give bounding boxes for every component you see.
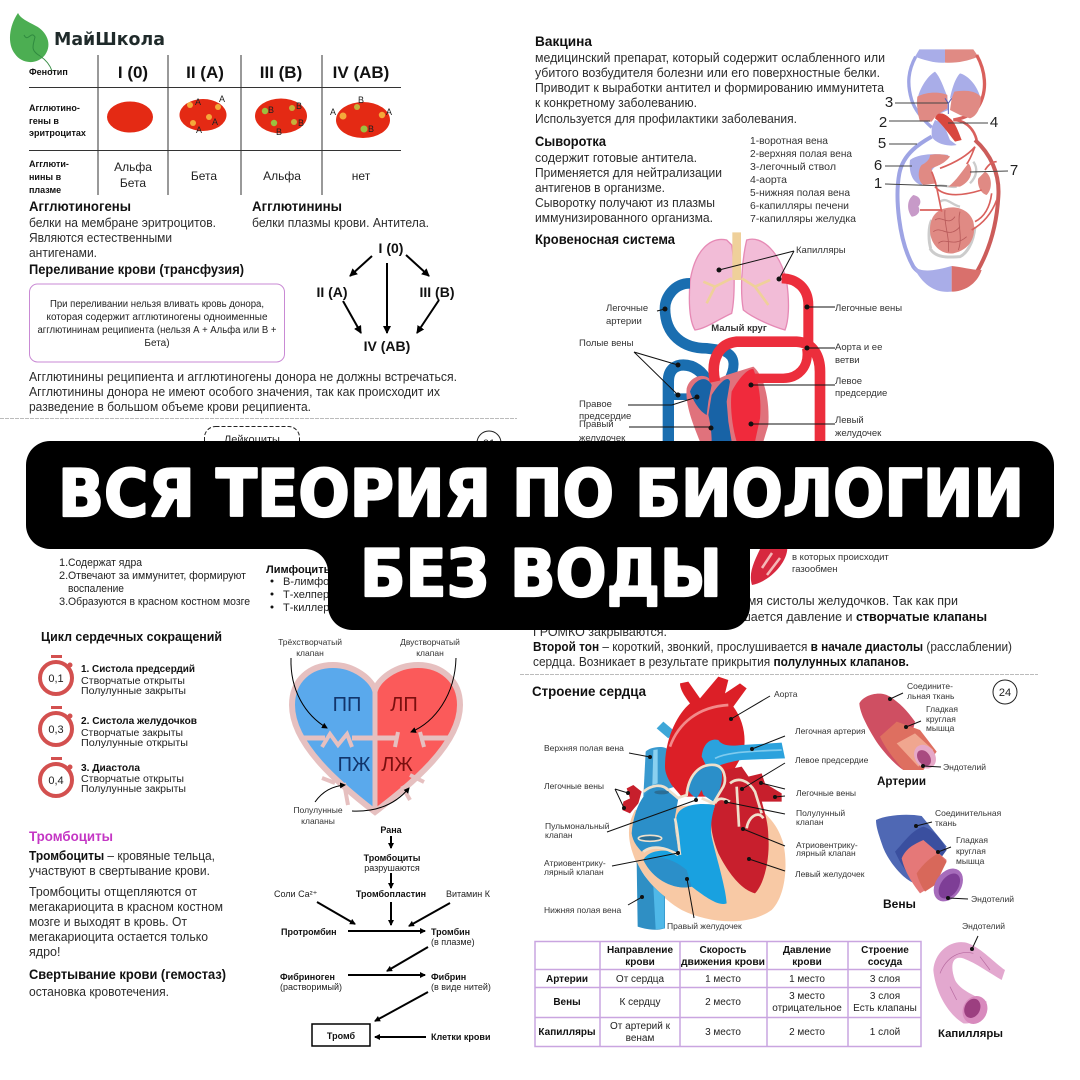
timer: atrial systole <box>40 655 195 697</box>
diagram: pulmonary and systemic circuits: Легочные вены <box>835 303 902 314</box>
text: heart sounds: ГРОМКО закрываются. <box>533 625 667 639</box>
text: white blood cell properties: 1. <box>59 557 68 569</box>
text: vaccine: к конкретному заболеванию. <box>535 96 697 110</box>
labels: Аорта <box>774 689 798 699</box>
text: white blood cell properties: Отвечают за иммунитет, формируют <box>68 570 246 582</box>
diagram: heart chambers and valves: Двустворчатый <box>400 637 460 647</box>
body vessels <box>898 137 932 278</box>
icon: red blood cell, no antigens <box>107 102 153 132</box>
pulmonary veins <box>622 785 642 813</box>
heading: transfusion: Переливание крови (трансфузия) <box>29 262 244 277</box>
superior vena cava <box>643 747 675 797</box>
intestine <box>930 207 974 253</box>
diagram: blood clotting flow: Рана <box>380 825 403 835</box>
text: lymphocytes list: Лимфоциты <box>266 564 333 576</box>
diagram: anatomical heart: Атриовентрику- <box>796 840 858 850</box>
aorta <box>665 677 747 797</box>
diagram: vein wall layers: Эндотелий <box>971 894 1014 904</box>
gray fat <box>935 162 976 207</box>
inferior vena cava <box>637 862 665 930</box>
text: platelets description: Тромбоциты отщепляются от <box>29 885 197 899</box>
table: blood group phenotypes: Агглюти- <box>29 159 69 169</box>
diagram: blood clotting flow: Тромбин <box>431 927 470 937</box>
text: serum: содержит готовые антитела. <box>535 151 697 165</box>
table: vessel comparison: венам <box>626 1033 654 1044</box>
page number 24: 24 <box>999 687 1011 699</box>
diagram: circulation with numbered vessels: 4 <box>990 114 998 131</box>
table: vessel comparison: отрицательное <box>772 1003 842 1014</box>
table: vessel comparison: От сердца <box>616 974 665 985</box>
diagram: anatomical heart: Атриовентрику- <box>544 858 606 868</box>
diagram: heart chambers and valves <box>278 637 460 826</box>
pulmonary chamber <box>688 766 722 802</box>
table: vessel comparison: 2 место <box>789 1027 825 1038</box>
text: white blood cell properties: воспаление <box>68 583 124 595</box>
text: heart sounds: сокращении желудочков в них резко повышается давление и створчатые клапаны <box>497 610 987 624</box>
diagram: pulmonary and systemic circuits: Левый <box>835 415 864 426</box>
diagram: blood group compatibility arrows <box>316 240 454 354</box>
icon: red blood cell, antigen A <box>180 94 226 135</box>
pulmonary arteries <box>665 283 727 351</box>
timer: diastole: Полулунные закрыты <box>81 784 186 795</box>
table: vessel comparison: крови <box>792 957 822 968</box>
table: vessel comparison <box>535 941 921 1047</box>
timer: ventricular systole: Полулунные открыты <box>81 738 188 749</box>
diagram: circulation with numbered vessels: 1 <box>874 175 882 192</box>
diagram: heart chambers and valves: Трёхстворчатый <box>278 637 342 647</box>
diagram: anatomical heart: Левое предсердие <box>795 755 869 765</box>
callout: transfusion rule: агглютининам реципиента (нельзя А + Альфа или В + <box>38 324 277 336</box>
page number 24 <box>993 680 1017 704</box>
text: vaccine: Используется для профилактики заболевания. <box>535 112 797 126</box>
stomach <box>948 163 971 187</box>
logo: МайШкола: МайШкола <box>54 29 165 50</box>
diagram: capillary: Капилляры <box>938 1028 1003 1040</box>
table: blood group phenotypes: плазме <box>29 185 61 195</box>
icon: red blood cell, antigen B: B <box>268 105 274 115</box>
table: blood group phenotypes: Альфа <box>114 160 152 174</box>
page number circle <box>477 431 501 455</box>
timer: diastole <box>40 757 186 796</box>
text: vaccine: медицинский препарат, который содержит ослабленного или <box>535 51 885 65</box>
diagram: heart chambers and valves: Полулунные <box>293 805 343 815</box>
text: agglutinogens definition <box>29 199 216 260</box>
table: blood group phenotypes: II (A) <box>186 63 224 82</box>
table: blood group phenotypes: эритроцитах <box>29 128 86 138</box>
table: blood group phenotypes <box>29 55 401 195</box>
heading: cardiac cycle: Цикл сердечных сокращений <box>41 629 222 644</box>
table: vessel comparison: движения крови <box>681 957 765 968</box>
right atrium <box>632 785 678 853</box>
diagram: heart chambers and valves: клапан <box>416 648 444 658</box>
diagram: artery wall layers: льная ткань <box>907 691 955 701</box>
text: lymphocytes list: Т-хелперы <box>283 589 337 601</box>
table: vessel comparison: 3 место <box>705 1027 741 1038</box>
liver <box>910 154 948 185</box>
diagram: heart chambers and valves: ПЖ <box>338 754 371 776</box>
diagram: capillary fragment with gas exchange note: газообмен <box>792 564 838 575</box>
diagram: blood group compatibility arrows: IV (AB) <box>364 338 410 354</box>
callout: transfusion rule: которая содержит агглютиногены одноименные <box>46 312 268 323</box>
diagram: pulmonary and systemic circuits: Аорта и ее <box>835 342 882 353</box>
text: platelets description: остановка кровотечения. <box>29 985 169 999</box>
text: white blood cell properties: Содержат ядра <box>68 557 143 569</box>
table: vessel comparison: 1 слой <box>870 1027 900 1038</box>
table: vessel comparison: Строение <box>861 945 909 956</box>
table: blood group phenotypes: нины в <box>29 172 62 182</box>
internal arteries and portal vein <box>920 147 997 230</box>
diagram: pulmonary and systemic circuits: Правый <box>579 419 614 430</box>
diagram: heart chambers and valves: клапан <box>296 648 324 658</box>
timer: atrial systole: 1. Систола предсердий <box>81 664 195 675</box>
diagram: circulation with numbered vessels: 7 <box>1010 162 1018 179</box>
icon: red blood cell, antigen B: B <box>298 118 304 128</box>
table: vessel comparison: сосуда <box>868 957 903 968</box>
table: blood group phenotypes: Агглютино- <box>29 103 80 113</box>
text: serum: антигенов в организме. <box>535 181 665 195</box>
text: vaccine: Вакцина <box>535 34 592 49</box>
diagram: heart chambers and valves: ПП <box>333 694 361 716</box>
lungs <box>917 72 948 122</box>
text: platelets description: мегакариоцита остается только <box>29 930 208 944</box>
diagram: blood group compatibility arrows: I (0) <box>379 240 403 256</box>
title banner <box>26 441 1054 630</box>
diagram: anatomical heart: Полулунный <box>796 808 845 818</box>
diagram: pulmonary and systemic circuits: ветви <box>835 355 860 366</box>
diagram: blood group compatibility arrows: III (B) <box>420 284 454 300</box>
table: vessel comparison: 2 место <box>705 997 741 1008</box>
diagram: pulmonary and systemic circuits: Малый круг <box>711 323 767 334</box>
timer: atrial systole: Створчатые открыты <box>81 676 185 687</box>
timer: ventricular systole <box>40 706 197 749</box>
diagram: pulmonary and systemic circuits: желудочек <box>579 433 626 444</box>
text: lymphocytes list <box>266 564 355 614</box>
text: agglutinin paragraph <box>29 370 457 414</box>
table: blood group phenotypes: IV (AB) <box>333 63 389 82</box>
table: blood group phenotypes: нет <box>352 169 371 183</box>
diagram: blood clotting flow: Фибриноген <box>280 972 335 982</box>
diagram: blood clotting flow: Фибрин <box>431 972 466 982</box>
legend: circulation diagram numbers: 1-воротная вена <box>750 135 828 147</box>
lungs <box>689 239 734 330</box>
diagram: artery wall layers: Артерии <box>877 774 926 788</box>
text: agglutinins definition: Агглютинины <box>252 199 342 214</box>
icon: red blood cell, antigen B <box>255 98 307 137</box>
leader lines <box>628 251 835 427</box>
text: agglutinogens definition: белки на мембране эритроцитов. <box>29 216 216 230</box>
labels: Капилляры <box>796 245 846 256</box>
text: vaccine: Приводит к выработки антител и формированию иммунитета <box>535 81 884 95</box>
text: vaccine: убитого возбудителя болезни или его поверхностные белки. <box>535 66 880 80</box>
icon: red blood cell, antigen A: A <box>196 125 202 135</box>
text: serum: Применяется для нейтрализации <box>535 166 722 180</box>
text: agglutinins definition <box>252 199 429 230</box>
leg capillaries <box>913 266 952 292</box>
table: blood group phenotypes: III (B) <box>260 63 302 82</box>
diagram: anatomical heart: Пульмональный <box>545 821 610 831</box>
legend: circulation diagram numbers: 4-аорта <box>750 174 787 186</box>
text: heart sounds <box>425 594 1012 669</box>
diagram: blood clotting flow: Тромбопластин <box>356 889 426 899</box>
diagram: blood clotting flow: (растворимый) <box>280 982 342 992</box>
timer: ventricular systole: 2. Систола желудочков <box>81 716 197 727</box>
valves and walls <box>643 765 763 855</box>
diagram: blood clotting flow: (в плазме) <box>431 937 475 947</box>
diagram: capillary fragment with gas exchange note <box>751 545 889 585</box>
legend: circulation diagram numbers: 5-нижняя полая вена <box>750 187 850 199</box>
diagram: pulmonary and systemic circuits: Полые вены <box>579 338 634 349</box>
trachea and bronchi <box>724 232 750 280</box>
callout: transfusion rule <box>30 284 284 362</box>
text: serum: Сыворотка <box>535 134 606 149</box>
icon: red blood cell, antigen B: B <box>276 127 282 137</box>
heading: platelets: Тромбоциты <box>29 829 113 844</box>
text: platelets description: Свертывание крови (гемостаз) <box>29 967 226 982</box>
diagram: blood clotting flow: Витамин К <box>446 889 491 899</box>
diagram: pulmonary and systemic circuits: артерии <box>606 316 642 327</box>
callout: transfusion rule: При переливании нельзя вливать кровь донора, <box>50 299 264 310</box>
text: lymphocytes list: В-лимфоциты <box>283 576 355 588</box>
aorta and branches <box>714 342 820 442</box>
legend: circulation diagram numbers: 6-капилляры печени <box>750 200 849 212</box>
table: vessel comparison: Направление <box>607 945 673 956</box>
diagram: anatomical heart: Легочная артерия <box>795 726 866 736</box>
logo: МайШкола <box>10 13 165 71</box>
table: vessel comparison: Капилляры <box>538 1027 596 1038</box>
diagram: artery wall layers: Эндотелий <box>943 762 986 772</box>
table: blood group phenotypes: Бета <box>120 176 146 190</box>
heart <box>686 367 769 442</box>
table: blood group phenotypes: Фенотип <box>29 67 68 77</box>
diagram: vein wall layers: ткань <box>935 818 957 828</box>
diagram: pulmonary and systemic circuits: Левое <box>835 376 862 387</box>
callout: transfusion rule: Бета) <box>144 338 170 349</box>
diagram: anatomical heart: Нижняя полая вена <box>544 905 621 915</box>
diagram: vein wall layers <box>876 808 1014 911</box>
diagram: capillary <box>933 921 1005 1040</box>
text: platelets description: Тромбоциты – кровяные тельца, <box>29 849 215 863</box>
text: platelets description: участвуют в свертывание крови. <box>29 864 210 878</box>
diagram: circulation with numbered vessels <box>874 49 1018 292</box>
timer: diastole: 0,4 <box>48 775 64 787</box>
text: heart sounds: Второй тон – короткий, звонкий, прослушивается в начале диастолы (расслаблении) <box>533 640 1012 654</box>
text: serum: иммунизированного организма. <box>535 211 713 225</box>
timer: diastole: Створчатые открыты <box>81 774 184 785</box>
timer: diastole: 3. Диастола <box>81 763 140 774</box>
spleen <box>978 172 991 195</box>
icon: red blood cell, antigen A: A <box>195 97 201 107</box>
diagram: blood clotting flow: Тромб <box>327 1031 356 1041</box>
page number circle: 01 <box>483 438 495 450</box>
text: serum <box>535 134 722 225</box>
diagram: anatomical heart: клапан <box>545 830 573 840</box>
head capillaries <box>915 49 945 63</box>
icon: red blood cell, antigens A and B: B <box>368 124 374 134</box>
diagram: blood group compatibility arrows: II (A) <box>316 284 348 300</box>
diagram: heart chambers and valves: ЛП <box>390 694 418 716</box>
table: vessel comparison: 3 слоя <box>870 991 900 1002</box>
table: blood group phenotypes: гены в <box>29 116 59 126</box>
timer: atrial systole: 0,1 <box>48 673 64 685</box>
diagram: blood clotting flow: Тромбоциты <box>364 853 421 863</box>
diagram: vein wall layers: Гладкая <box>956 835 988 845</box>
diagram: artery wall layers: мышца <box>926 723 955 733</box>
table: vessel comparison: крови <box>625 957 655 968</box>
table: blood group phenotypes: Бета <box>191 169 217 183</box>
label: leukocytes heading box <box>204 426 300 456</box>
timer: ventricular systole: 0,3 <box>48 724 64 736</box>
table: vessel comparison: От артерий к <box>610 1021 671 1032</box>
diagram: circulation with numbered vessels: 6 <box>874 157 882 174</box>
table: vessel comparison: 1 место <box>789 974 825 985</box>
venae cavae <box>668 365 707 442</box>
diagram: vein wall layers: мышца <box>956 856 985 866</box>
table: vessel comparison: 3 слоя <box>870 974 900 985</box>
diagram: capillary fragment with gas exchange note: в которых происходит <box>792 552 889 563</box>
diagram: anatomical heart: Легочные вены <box>544 781 604 791</box>
heart <box>932 120 957 146</box>
diagram: pulmonary and systemic circuits: предсердие <box>835 388 887 399</box>
text: agglutinin paragraph: Агглютинины донора не имеют особого значения, так как происходит их <box>29 385 441 399</box>
table: vessel comparison: Вены <box>553 997 581 1008</box>
table: vessel comparison: 1 место <box>705 974 741 985</box>
diagram: artery wall layers: круглая <box>926 714 956 724</box>
text: agglutinogens definition: антигенами. <box>29 246 97 260</box>
diagram: vein wall layers: круглая <box>956 846 986 856</box>
diagram: anatomical heart: Правый желудочек <box>667 921 742 931</box>
diagram: pulmonary and systemic circuits: предсердие <box>579 411 631 422</box>
leader lines <box>607 696 785 918</box>
pulmonary stub <box>657 722 675 738</box>
diagram: anatomical heart: клапан <box>796 817 824 827</box>
icon: red blood cell, antigen A: A <box>219 94 225 104</box>
text: heart sounds: Первый тон – длинный, глухой, прослушивается во время систолы желудочков. Так как при <box>425 594 958 608</box>
diagram: artery wall layers: Гладкая <box>926 704 958 714</box>
diagram: blood clotting flow <box>274 825 491 1046</box>
number labels <box>885 103 1008 186</box>
diagram: anatomical heart: лярный клапан <box>796 848 856 858</box>
diagram: anatomical heart: лярный клапан <box>544 867 604 877</box>
title line 1: ВСЯ ТЕОРИЯ ПО БИОЛОГИИ <box>58 457 1024 532</box>
diagram: pulmonary and systemic circuits: Правое <box>579 399 612 410</box>
heading: circulatory system: Кровеносная система <box>535 232 675 247</box>
text: platelets description: мозге и выходят в кровь. От <box>29 915 187 929</box>
text: agglutinin paragraph: Агглютинины реципиента и агглютиногены донора не должны встречаться. <box>29 370 457 384</box>
icon: red blood cell, antigen A: A <box>212 117 218 127</box>
text: white blood cell properties: 3. <box>59 596 68 608</box>
diagram: blood clotting flow: (в виде нитей) <box>431 982 491 992</box>
title line 2: БЕЗ ВОДЫ <box>360 537 722 612</box>
icon: red blood cell, antigens A and B <box>330 95 392 138</box>
text: lymphocytes list: Т-киллеры <box>283 602 337 614</box>
table: vessel comparison: Скорость <box>700 945 746 956</box>
icon: red blood cell, antigen B: B <box>296 101 302 111</box>
timer: ventricular systole: Створчатые закрыты <box>81 728 183 739</box>
text: heart sounds: сердца. Возникает в результате прикрытия полулунных клапанов. <box>533 655 909 669</box>
legend: circulation diagram numbers <box>750 135 856 225</box>
diagram: blood clotting flow: разрушаются <box>364 863 420 873</box>
text: agglutinin paragraph: разведение в большом объеме крови реципиента. <box>29 400 311 414</box>
text: white blood cell properties <box>59 557 250 608</box>
text: platelets description: ядро! <box>29 945 60 959</box>
text: vaccine <box>535 34 885 126</box>
diagram: heart chambers and valves: клапаны <box>301 816 335 826</box>
timer: atrial systole: Полулунные закрыты <box>81 686 186 697</box>
diagram: anatomical heart: Верхняя полая вена <box>544 743 624 753</box>
text: white blood cell properties: 2. <box>59 570 68 582</box>
diagram: pulmonary and systemic circuits: Легочные <box>606 303 648 314</box>
diagram: circulation with numbered vessels: 2 <box>879 114 887 131</box>
peach heart wall <box>629 803 786 921</box>
diagram: vein wall layers: Вены <box>883 897 916 911</box>
diagram: blood clotting flow: Соли Ca²⁺ <box>274 889 318 899</box>
diagram: vein wall layers: Соединительная <box>935 808 1002 818</box>
table: vessel comparison: 3 место <box>789 991 825 1002</box>
text: agglutinogens definition: Являются естественными <box>29 231 172 245</box>
diagram: capillary: Эндотелий <box>962 921 1005 931</box>
pulmonary artery <box>702 740 785 770</box>
kidney <box>908 195 920 217</box>
heading: heart structure: Строение сердца <box>532 684 646 699</box>
table: vessel comparison: Давление <box>783 945 832 956</box>
diagram: pulmonary and systemic circuits: желудочек <box>835 428 882 439</box>
table: blood group phenotypes: I (0) <box>118 63 148 82</box>
diagram: pulmonary and systemic circuits <box>579 232 902 444</box>
diagram: anatomical heart <box>544 677 869 931</box>
legend: circulation diagram numbers: 7-капилляры желудка <box>750 213 856 225</box>
icon: red blood cell, antigens A and B: A <box>386 107 392 117</box>
diagram: artery wall layers: Соедините- <box>907 681 953 691</box>
diagram: anatomical heart: Легочные вены <box>796 788 856 798</box>
text: agglutinogens definition: Агглютиногены <box>29 199 131 214</box>
diagram: circulation with numbered vessels: 3 <box>885 94 893 111</box>
upper vessels <box>909 57 932 127</box>
label: leukocytes heading box: Лейкоциты <box>224 434 280 446</box>
diagram: circulation with numbered vessels: 5 <box>878 135 886 152</box>
right ventricle <box>643 804 727 904</box>
table: vessel comparison: Артерии <box>546 974 588 985</box>
text: platelets description: мегакариоцита в красном костном <box>29 900 223 914</box>
table: vessel comparison: К сердцу <box>619 997 661 1008</box>
legend: circulation diagram numbers: 2-верхняя полая вена <box>750 148 852 160</box>
diagram: blood clotting flow: Протромбин <box>281 927 337 937</box>
diagram: artery wall layers <box>859 681 986 788</box>
text: agglutinins definition: белки плазмы крови. Антитела. <box>252 216 429 230</box>
icon: red blood cell, antigens A and B: A <box>330 107 336 117</box>
table: vessel comparison: Есть клапаны <box>853 1003 917 1014</box>
diagram: heart chambers and valves: ЛЖ <box>381 754 413 776</box>
diagram: anatomical heart: Левый желудочек <box>795 869 865 879</box>
text: serum: Сыворотку получают из плазмы <box>535 196 715 210</box>
table: blood group phenotypes: Альфа <box>263 169 301 183</box>
text: white blood cell properties: Образуются в красном костном мозге <box>68 596 250 608</box>
left chambers <box>711 767 769 893</box>
legend: circulation diagram numbers: 3-легочный ствол <box>750 161 836 173</box>
icon: red blood cell, antigens A and B: B <box>358 95 364 105</box>
pulmonary veins <box>782 278 808 348</box>
text: platelets description <box>29 849 226 999</box>
diagram: blood clotting flow: Клетки крови <box>431 1032 490 1042</box>
